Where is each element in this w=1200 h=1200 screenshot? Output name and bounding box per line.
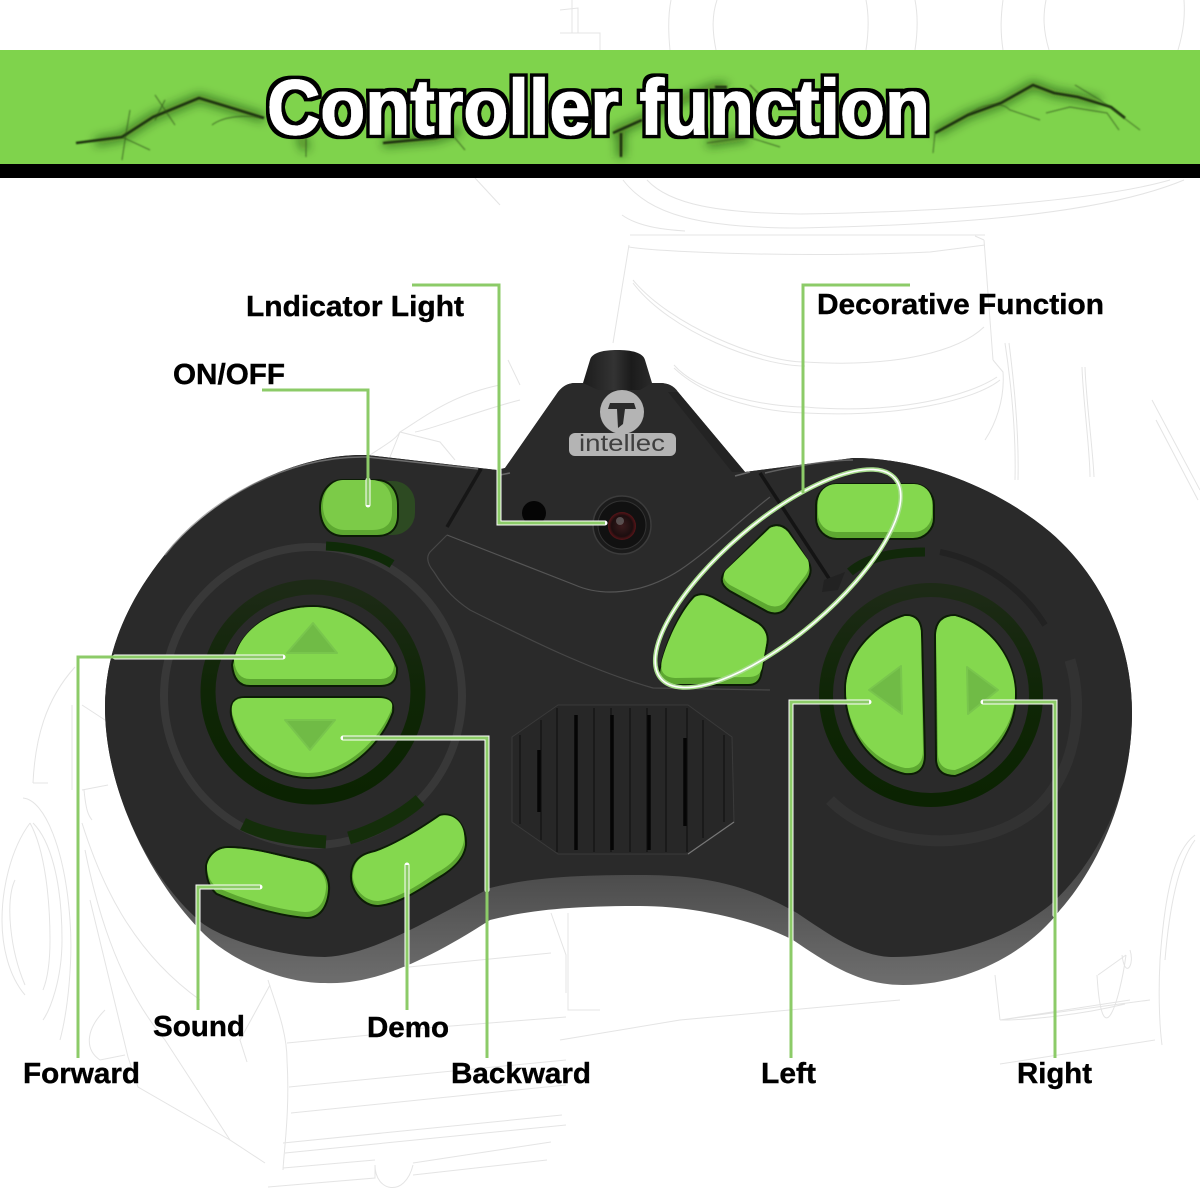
panel seams xyxy=(428,469,845,690)
on/off slide switch xyxy=(321,480,415,535)
connector: decorative function xyxy=(803,285,910,493)
button: right xyxy=(936,616,1015,775)
left wheel and track art xyxy=(23,798,71,1040)
label: on/off: ON/OFF xyxy=(173,359,285,391)
connector: right xyxy=(983,702,1055,1058)
label: demo: Demo xyxy=(367,1012,449,1044)
wedge shading xyxy=(668,392,745,472)
button: decorative top xyxy=(817,484,933,538)
connector: sound xyxy=(198,887,260,1010)
button: forward xyxy=(233,607,396,685)
connector: demo xyxy=(404,865,410,1010)
connector: on/off xyxy=(262,390,368,505)
title: Controller function xyxy=(267,63,930,151)
knob xyxy=(583,350,652,390)
label: forward: Forward xyxy=(23,1058,140,1090)
button: sound xyxy=(207,848,328,917)
indicator hole xyxy=(522,501,546,525)
controller xyxy=(105,350,1132,985)
label: right: Right xyxy=(1017,1058,1092,1090)
button: demo xyxy=(352,815,465,905)
indicator LED xyxy=(593,496,651,554)
label: backward: Backward xyxy=(451,1058,591,1090)
label: left: Left xyxy=(761,1058,816,1090)
lightning cracks xyxy=(76,85,1140,160)
speaker grille xyxy=(512,705,734,854)
connector: left xyxy=(791,702,869,1058)
connector: forward xyxy=(78,657,283,1058)
right d-pad rings xyxy=(826,552,1077,841)
button: decorative lower xyxy=(660,595,767,684)
connector: indicator light xyxy=(412,285,605,523)
button: backward xyxy=(232,698,392,777)
body top surface xyxy=(105,383,1132,957)
decorative function highlight ellipse xyxy=(624,435,932,722)
label: sound: Sound xyxy=(153,1011,245,1043)
left d-pad rings xyxy=(164,546,462,845)
rim highlight xyxy=(165,457,478,555)
logo: intellec badge xyxy=(569,390,676,456)
button: left xyxy=(846,616,924,773)
label: decorative function: Decorative Function xyxy=(817,289,1104,321)
connector: backward xyxy=(343,738,487,1058)
header band xyxy=(0,50,1200,178)
body edge xyxy=(105,383,1132,985)
label: indicator light: Lndicator Light xyxy=(246,291,464,323)
button: decorative middle xyxy=(723,526,810,612)
logo: intellec badge: intellec xyxy=(579,430,665,456)
